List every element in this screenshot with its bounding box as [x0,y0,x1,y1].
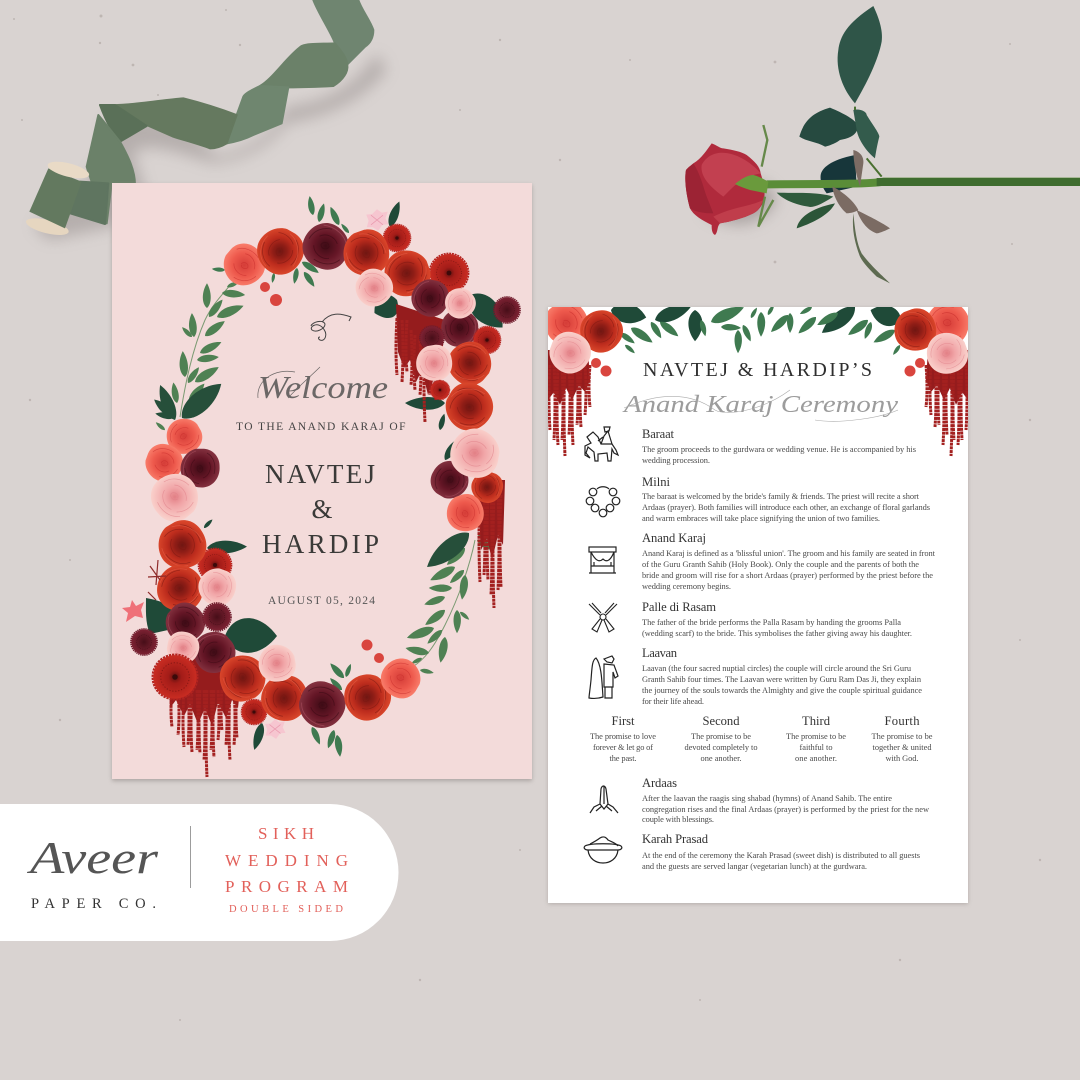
corner flowers [548,307,968,376]
names [262,459,379,559]
logo: PAPER CO. [31,896,156,912]
leaves of the rose [777,6,882,228]
names: & [311,494,333,524]
section: Ardaas [642,776,930,824]
section: Anand Karaj: bride and groom will rise for a short Ardaas (prayer) performed by the priest before the [642,571,933,580]
icon: canopy [589,547,616,573]
promise: First: First [612,714,635,728]
four promises [590,714,933,763]
product label [225,824,348,915]
heading: NAVTEJ & HARDIP’S [643,359,872,381]
promise: Third: one another. [795,754,837,763]
foliage garland [548,307,968,456]
logo: Aveer [26,832,159,883]
section: Anand Karaj: wedding ceremony begins. [642,582,731,591]
product label: PROGRAM [225,877,348,896]
date: AUGUST 05, 2024 [268,595,375,607]
section: Ardaas: After the laavan the raagis sing shabad (hymns) of Anand Sahib. The entire [642,794,892,803]
promise: Second: devoted completely to [684,743,758,752]
promise: Second [684,714,758,763]
promise: First [590,714,656,763]
panel: white program card [536,293,975,904]
promise: Second: The promise to be [691,732,751,741]
script subtitle [622,390,898,421]
section: Milni [642,475,930,523]
promise: Fourth: with God. [886,754,918,763]
flower wreath [122,209,520,739]
ribbon and spool [24,0,387,240]
section: Anand Karaj: Anand Karaj [642,531,706,545]
section: Palle di Rasam: The father of the bride performs the Palla Rasam by handing the grooms Palla [642,618,901,627]
script subtitle: Anand Karaj Ceremony [622,392,898,418]
names: HARDIP [262,529,379,559]
icon: horse and rider [585,427,618,461]
icon: ik onkar [311,314,351,340]
promise: First: forever & let go of [593,743,653,752]
section: Milni: The baraat is welcomed by the bride's family & friends. The priest will recite a short [642,492,920,501]
section: Anand Karaj: of the Guru Granth Sahib (Holy Book). Only the couple and the parents of both the [642,560,919,569]
section: Ardaas: Ardaas [642,776,677,790]
icon: garland [586,487,620,517]
rose bloom [685,143,765,235]
section: Palle di Rasam: (wedding scarf) to the bride. This symbolises the father giving away his daughter. [642,629,912,638]
promise: First: the past. [610,754,636,763]
section: Laavan: Laavan [642,646,678,660]
subtitle: TO THE ANAND KARAJ OF [236,421,406,433]
section: Laavan [642,646,922,706]
section: Laavan: Granth Sahib four times. The Laavan were written by Guru Ram Das Ji, they explain [642,675,922,684]
amaranth drips [168,304,505,777]
badge: brand and product [0,804,398,941]
section: Anand Karaj: Anand Karaj is defined as a 'blissful union'. The groom and his family are seated in front [642,549,936,558]
section: Palle di Rasam: Palle di Rasam [642,600,716,614]
promise: Third [786,714,846,763]
section: Karah Prasad [642,832,920,871]
section: Karah Prasad: and the guests are served langar (vegetarian lunch) at the gurdwara. [642,862,867,871]
section: Laavan: the journey of the souls towards the Almighty and give the couple spiritual guidance [642,686,922,695]
product label: WEDDING [225,851,348,870]
icon: bowl [584,837,622,863]
amaranth sides [548,350,968,456]
section: Laavan: Laavan (the four sacred nuptial circles) the couple will circle around the Sri Guru [642,664,912,673]
product label: DOUBLE SIDED [229,904,343,915]
promise: Fourth: Fourth [884,714,920,728]
section: Milni: and warm embraces will take place signifying the union of two families. [642,514,880,523]
promise: Second: one another. [700,754,742,763]
vine left [151,280,245,432]
product label: SIKH [258,824,314,843]
section: Karah Prasad: Karah Prasad [642,832,709,846]
icon: scarf [589,603,617,632]
section: Laavan: for their life ahead. [642,697,704,706]
section: Palle di Rasam [642,600,912,638]
section: Baraat: The groom proceeds to the gurdwara or wedding venue. He is accompanied by his [642,445,916,454]
withered leaves [832,150,890,283]
promise: Fourth: together & united [872,743,932,752]
section: Milni: Milni [642,475,670,489]
section: Milni: Ardaas (prayer). Both families will introduce each other, an exchange of floral garlands [642,503,930,512]
section: Baraat: wedding procession. [642,456,710,465]
welcome script: Welcome [258,369,388,405]
icon: couple [589,656,618,698]
vine right [405,516,496,675]
promise: Fourth: The promise to be [872,732,933,741]
logo [26,832,159,912]
names: NAVTEJ [265,459,375,489]
section: Baraat [642,427,916,465]
stem [767,182,1080,184]
section: Karah Prasad: At the end of the ceremony the Karah Prasad (sweet dish) is distributed to all guests [642,851,920,860]
promise: Third: The promise to be [786,732,846,741]
sepal [735,175,768,193]
promise: First: The promise to love [590,732,656,741]
promise: Second: Second [702,714,740,728]
sprigs and dark leaves [146,196,512,757]
promise: Third: faithful to [800,743,832,752]
section: Anand Karaj [642,531,936,591]
long stem rose [685,6,1080,283]
section: Ardaas: couple with blessings. [642,815,714,824]
promise: Third: Third [802,714,831,728]
icon: praying hands [590,786,618,813]
section: Baraat: Baraat [642,427,674,441]
section: Ardaas: congregation rises and the final Ardaas (prayer) is performed by the priest for the new [642,805,930,814]
panel: pink welcome card [112,183,532,781]
promise: Fourth [872,714,933,763]
